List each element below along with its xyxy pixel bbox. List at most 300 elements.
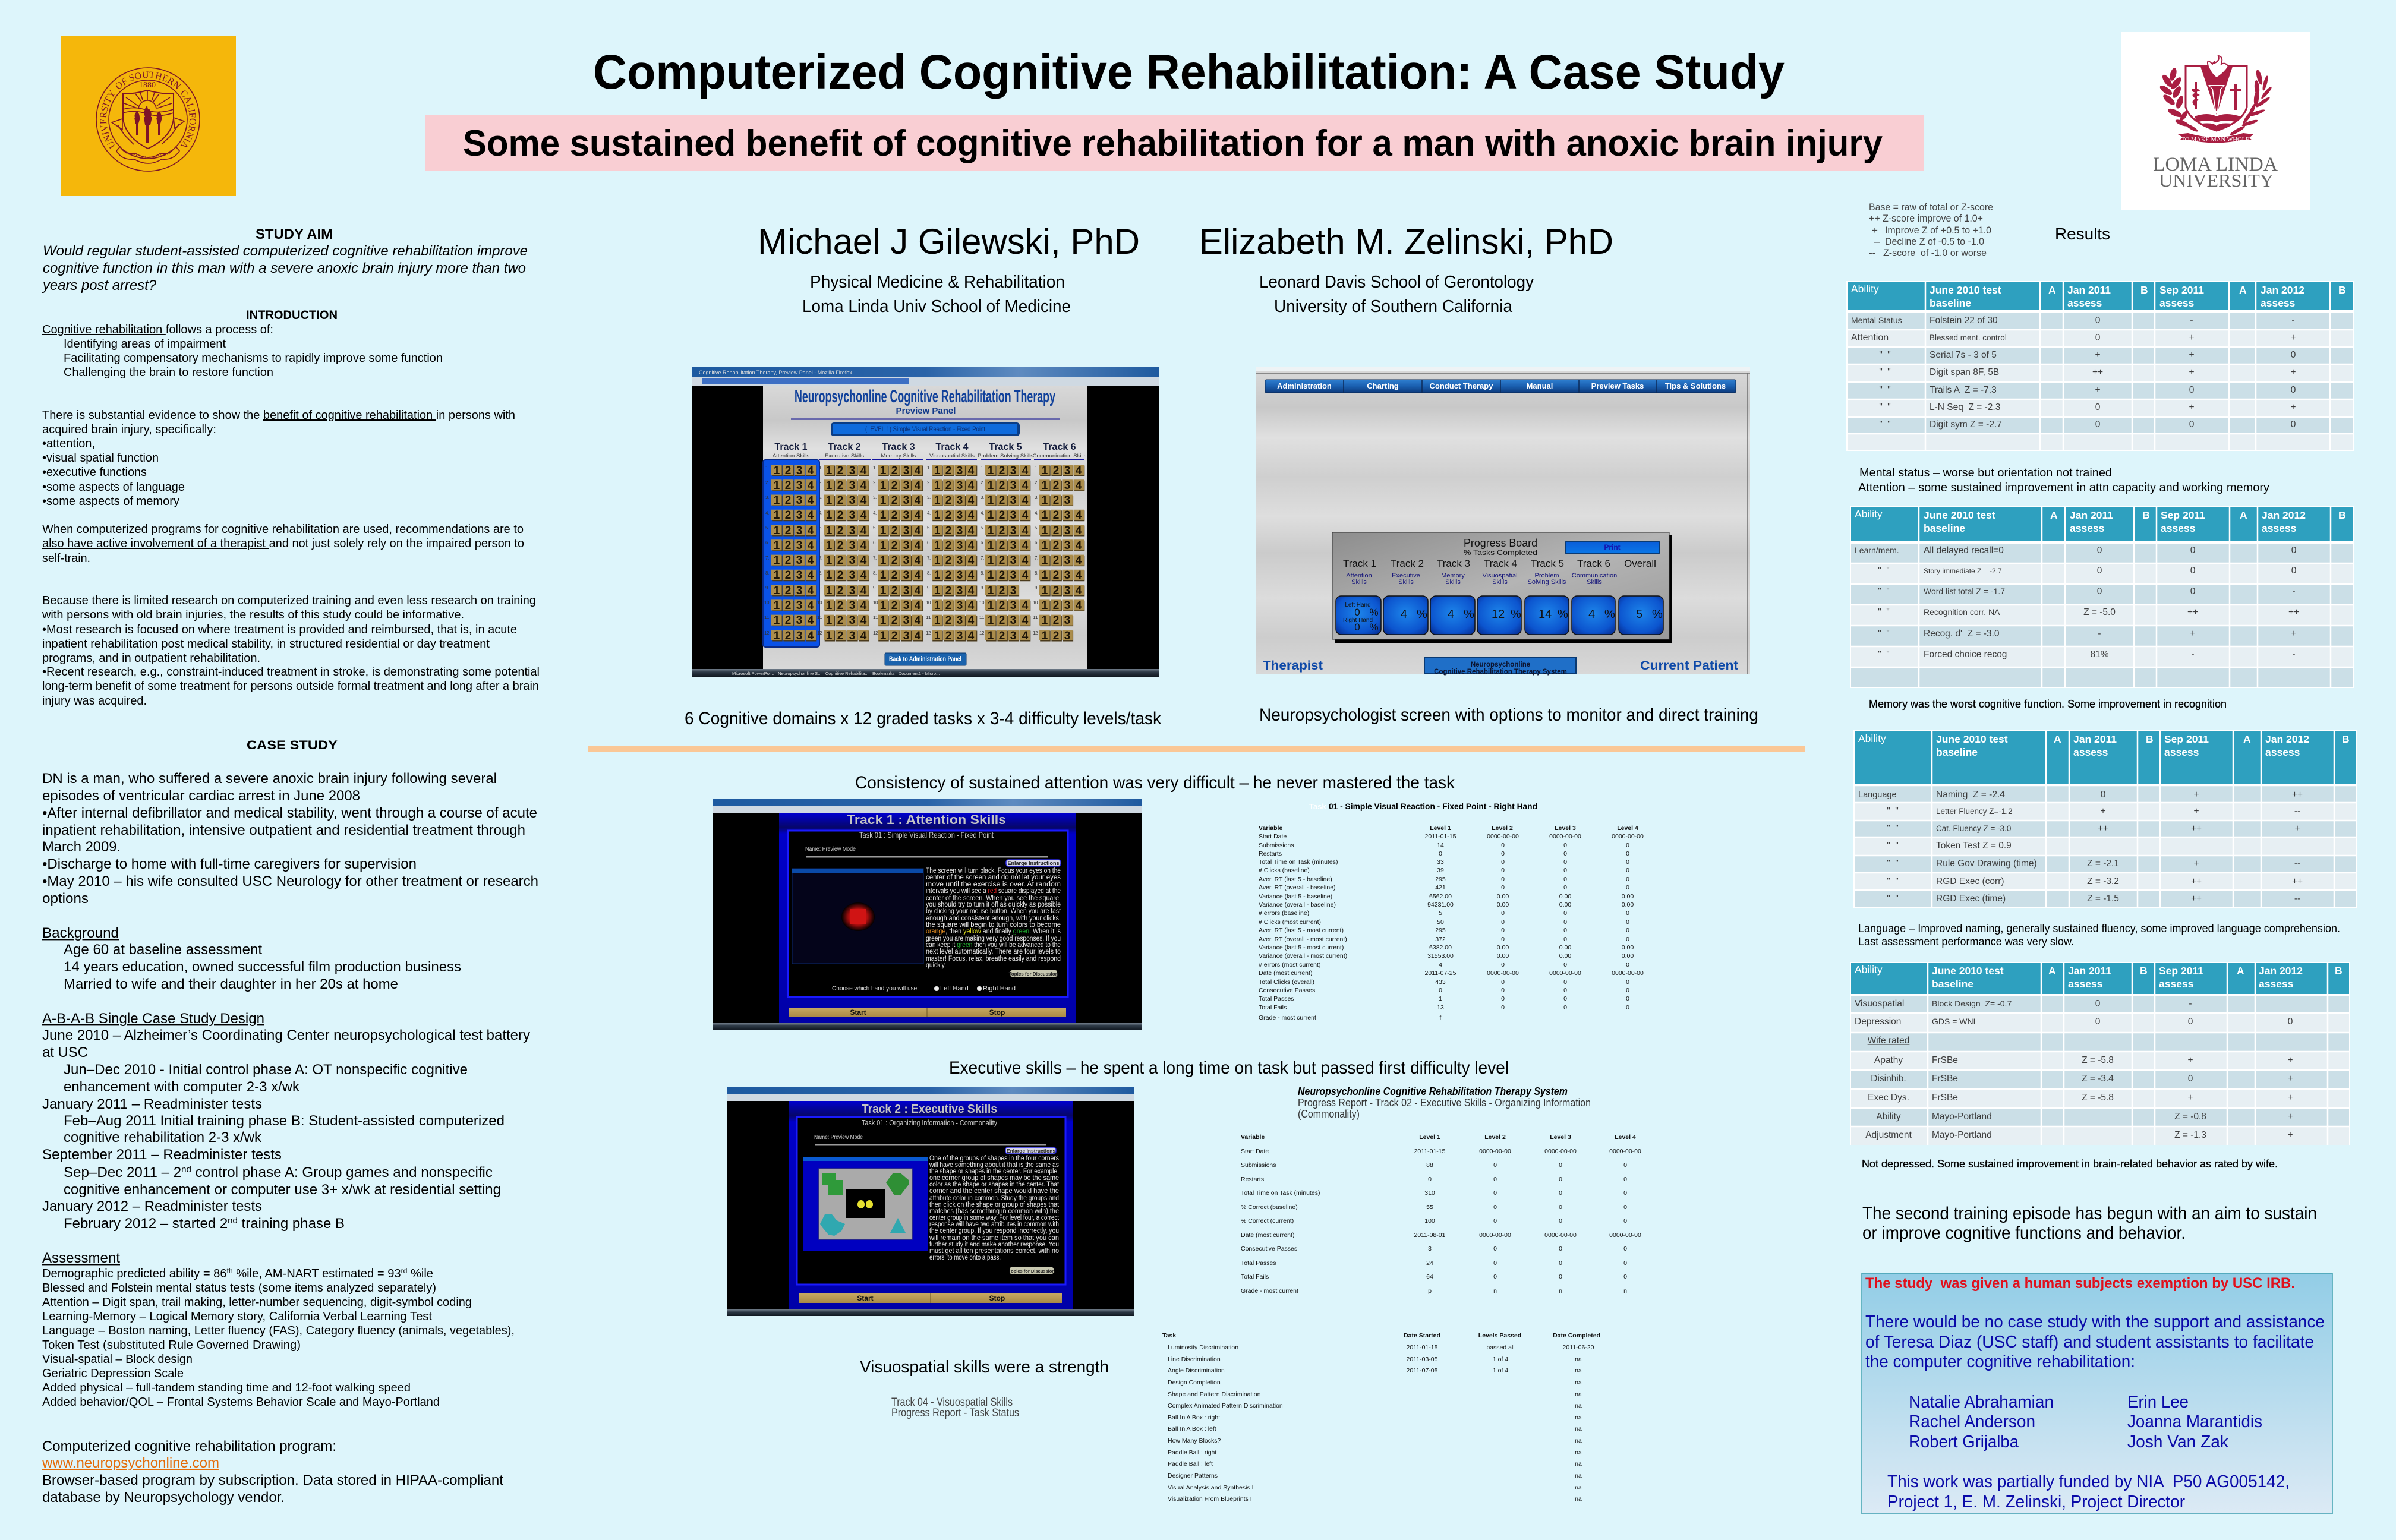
- data table: simple visual reaction: 0: [1501, 961, 1505, 968]
- progress board: 4: [1448, 608, 1454, 621]
- data table: simple visual reaction: 421: [1435, 884, 1446, 891]
- results table: learning and memory: Z = -5.0: [2083, 607, 2116, 617]
- task row numbers: 101010101010: [764, 600, 1038, 605]
- data table: simple visual reaction: Aver. RT (overall - most current): [1259, 936, 1347, 943]
- screenshot: track 1 attention skills: Topics for Discussion: [1009, 971, 1058, 977]
- top menu bar: Tips & Solutions: [1665, 381, 1726, 390]
- caption: visuospatial skills: Visuospatial skills were a strength: [860, 1358, 1109, 1377]
- progress board: 4: [1588, 608, 1595, 621]
- results table: mental status and attention: " ": [1879, 350, 1891, 360]
- results table: mental status and attention: Sep 2011: [2159, 284, 2204, 296]
- left column: case study: Age 60 at baseline assessment: [64, 942, 262, 958]
- data table: simple visual reaction: 2011-01-15: [1425, 833, 1456, 840]
- progress board: Communication: [1572, 572, 1617, 579]
- author: Elizabeth M. Zelinski: Elizabeth M. Zelinski, PhD: [1199, 222, 1613, 261]
- results table: visuospatial, depression and wife-rated behavior: +: [2287, 1112, 2293, 1122]
- task instructions: [929, 1155, 1060, 1261]
- data table: organizing information: p: [1428, 1287, 1432, 1295]
- data table: simple visual reaction: 0: [1563, 850, 1567, 857]
- data table: organizing information: Date (most current): [1241, 1232, 1294, 1239]
- left column: introduction: •some aspects of language: [42, 481, 185, 494]
- left column: case study: Added behavior/QOL – Frontal Systems Behavior Scale and Mayo-Portland: [42, 1396, 440, 1409]
- left column: introduction: self-train.: [42, 552, 90, 565]
- data table: visuospatial task status: Task: [1162, 1332, 1176, 1339]
- left column: program note: [42, 1438, 503, 1506]
- left column: introduction: INTRODUCTION: [246, 308, 338, 322]
- left column: case study: cognitive rehabilitation 2-3 x/wk: [64, 1129, 262, 1145]
- data table: simple visual reaction: 372: [1435, 936, 1446, 943]
- conclusion text: [1862, 1204, 2317, 1243]
- data table: simple visual reaction: 295: [1435, 876, 1446, 883]
- data table: simple visual reaction: Total Clicks (overall): [1259, 979, 1314, 986]
- results table: mental status and attention: Jan 2012: [2261, 284, 2304, 296]
- data table: organizing information: (Commonality): [1298, 1108, 1360, 1120]
- legend: score key: Base = raw of total or Z-score: [1869, 201, 1993, 213]
- author: Michael J Gilewski: Loma Linda Univ School of Medicine: [802, 297, 1071, 316]
- results table: language: +: [2294, 823, 2300, 834]
- results table: language: " ": [1887, 841, 1899, 851]
- data table: organizing information: 55: [1426, 1204, 1433, 1211]
- results table: learning and memory: -: [2292, 586, 2296, 597]
- results table: visuospatial, depression and wife-rated behavior: Jan 2012: [2259, 965, 2303, 977]
- data table: organizing information: 0: [1623, 1260, 1627, 1267]
- results table: visuospatial, depression and wife-rated behavior: +: [2187, 1055, 2193, 1065]
- results table: language: " ": [1887, 894, 1899, 904]
- acknowledgements box: There would be no case study with the support and assistance: [1865, 1312, 2325, 1331]
- results table: mental status and attention: Jan 2011: [2067, 284, 2111, 296]
- results table: visuospatial, depression and wife-rated behavior: Mayo-Portland: [1932, 1130, 1992, 1140]
- data table: organizing information: 310: [1424, 1189, 1435, 1197]
- data table: simple visual reaction: 0000-00-00: [1487, 833, 1519, 840]
- results table: learning and memory: Sep 2011: [2161, 509, 2205, 521]
- data table: simple visual reaction: Consecutive Passes: [1259, 987, 1315, 994]
- progress board: 0: [1354, 607, 1360, 618]
- results table: visuospatial, depression and wife-rated behavior: +: [2187, 1093, 2193, 1103]
- left column: case study: th: [227, 1267, 233, 1275]
- task instructions: move until the exercise is over. At random: [926, 881, 1061, 888]
- data table: simple visual reaction: 0: [1563, 859, 1567, 866]
- results table: mental status and attention: baseline: [1930, 297, 1971, 309]
- top menu bar: Conduct Therapy: [1430, 381, 1493, 390]
- results table: language: Z = -1.5: [2087, 894, 2119, 904]
- left column: case study: Visual-spatial – Block design: [42, 1353, 193, 1366]
- data table: visuospatial task status: na: [1575, 1391, 1582, 1398]
- data table: visuospatial task status: [1162, 1332, 1600, 1503]
- left column: introduction: Challenging the brain to restore function: [64, 366, 273, 379]
- left column: case study: inpatient rehabilitation, intensive outpatient and residential treatment through: [42, 822, 525, 838]
- progress board: Progress Board: [1464, 537, 1537, 549]
- data table: simple visual reaction: 2011-07-25: [1425, 970, 1456, 977]
- results table: language: RGD Exec (corr): [1936, 876, 2004, 886]
- data table: simple visual reaction: 0.00: [1497, 901, 1509, 908]
- results table: learning and memory: ++: [2288, 607, 2299, 617]
- data table: simple visual reaction: 0: [1501, 884, 1505, 891]
- results table: visuospatial, depression and wife-rated behavior: Ability: [1876, 1112, 1901, 1122]
- results table: mental status and attention: Attention: [1851, 333, 1889, 343]
- data table: organizing information: Level 4: [1615, 1134, 1636, 1141]
- results table: mental status and attention: +: [2290, 333, 2296, 343]
- data table: visuospatial task status: passed all: [1486, 1344, 1515, 1351]
- left column: case study: control phase A: Group games and nonspecific: [191, 1165, 493, 1181]
- results table: learning and memory: June 2010 test: [1924, 509, 1995, 521]
- data table: visuospatial task status: Date Started: [1404, 1332, 1440, 1339]
- task instructions: quickly.: [926, 962, 946, 969]
- results table: visuospatial, depression and wife-rated behavior: assess: [2159, 978, 2194, 990]
- results table: mental status and attention: 0: [2291, 419, 2296, 430]
- screenshot: preview panel track grid: (LEVEL 1) Simple Visual Reaction - Fixed Point: [865, 425, 986, 433]
- task instructions: will remain on the same item so that you can: [929, 1235, 1059, 1242]
- track column headers: Memory Skills: [881, 453, 916, 459]
- acknowledgements box: Project 1, E. M. Zelinski, Project Director: [1887, 1492, 2185, 1511]
- progress board: 12: [1492, 608, 1505, 621]
- results table: learning and memory: +: [2291, 629, 2297, 639]
- results table: visuospatial, depression and wife-rated behavior: 0: [2095, 1017, 2101, 1027]
- data table: organizing information: 0: [1623, 1273, 1627, 1280]
- left column: introduction: Identifying areas of impairment: [64, 337, 226, 351]
- data table: organizing information: n: [1623, 1287, 1627, 1295]
- data table: organizing information: n: [1493, 1287, 1497, 1295]
- legend: score key: Z-score of -1.0 or worse: [1883, 247, 1987, 258]
- acknowledgements box: The study was given a human subjects exemption by USC IRB.: [1865, 1275, 2295, 1292]
- legend: score key: ++ Z-score improve of 1.0+: [1869, 213, 1983, 224]
- data table: simple visual reaction: # errors (baseline): [1259, 910, 1309, 917]
- left column: introduction: There is substantial evidence to show the benefit of cognitive rehabilitation in persons with: [42, 409, 515, 422]
- results table: mental status and attention: " ": [1879, 402, 1891, 412]
- data table: simple visual reaction: 0000-00-00: [1549, 833, 1581, 840]
- screenshot: track 2 executive skills: Stop: [989, 1294, 1005, 1302]
- left column: case study: •May 2010 – his wife consulted USC Neurology for other treatment or research: [42, 873, 538, 889]
- data table: simple visual reaction: 0: [1501, 910, 1505, 917]
- results table: visuospatial, depression and wife-rated behavior: 0: [2095, 999, 2101, 1009]
- data table: simple visual reaction: 0.00: [1559, 944, 1571, 951]
- screenshot: preview panel track grid: Microsoft PowerPoi... Neuropsychonline S... Cognitive Rehabilita... Bookmarks Document1 - Micro...: [732, 671, 940, 676]
- data table: organizing information: 0: [1623, 1189, 1627, 1197]
- left column: case study: %ile, AM-NART estimated = 93: [233, 1267, 401, 1280]
- tile digits: 12341234123412341234123: [774, 630, 1070, 642]
- heading: results: Results: [2055, 225, 2110, 243]
- data table: organizing information: Level 1: [1419, 1134, 1440, 1141]
- left column: case study: cognitive enhancement or computer use 3+ x/wk at residential setting: [64, 1182, 501, 1198]
- results table: visuospatial, depression and wife-rated behavior: June 2010 test: [1932, 965, 2004, 977]
- results table: mental status and attention: 0: [2291, 385, 2296, 395]
- task instructions: center of the screen. When you see the square,: [926, 895, 1061, 902]
- acknowledgements box: of Teresa Diaz (USC staff) and student assistants to facilitate: [1865, 1333, 2314, 1352]
- data table: simple visual reaction: 0: [1563, 995, 1567, 1002]
- task instructions: the square will begin to turn colors to become: [926, 922, 1061, 929]
- data table: simple visual reaction: 39: [1437, 867, 1444, 874]
- subtitle banner: Some sustained benefit of cognitive rehabilitation for a man with anoxic brain injury: [463, 123, 1883, 164]
- task row numbers: 2.2.2.2.2.2.: [765, 480, 1038, 485]
- results table: learning and memory: Word list total Z = -1.7: [1924, 586, 2005, 596]
- progress board: 0: [1354, 621, 1360, 633]
- results table: visuospatial, depression and wife-rated behavior: +: [2287, 1074, 2293, 1084]
- left column: case study: [42, 739, 538, 1409]
- finding: language: [1858, 923, 2340, 948]
- finding: memory: Memory was the worst cognitive function. Some improvement in recognition: [1869, 698, 2227, 710]
- legend: score key: –: [1874, 236, 1880, 247]
- data table: simple visual reaction: 33: [1437, 859, 1444, 866]
- legend: score key: [1869, 201, 1993, 258]
- results table: language: Naming Z = -2.4: [1936, 790, 2005, 800]
- left column: case study: January 2012 – Readminister tests: [42, 1198, 262, 1214]
- data table: simple visual reaction: 13: [1437, 1004, 1444, 1011]
- top menu bar: Charting: [1367, 381, 1399, 390]
- left column: case study: at USC: [42, 1044, 88, 1061]
- results table: learning and memory: -: [2098, 629, 2101, 639]
- acknowledgements box: This work was partially funded by NIA P50 AG005142,: [1887, 1472, 2290, 1491]
- results table: learning and memory: [1850, 506, 2354, 688]
- results table: learning and memory: Learn/mem.: [1855, 545, 1899, 555]
- data table: visuospatial task status: Angle Discrimination: [1168, 1367, 1225, 1374]
- data table: simple visual reaction: 0: [1626, 1004, 1629, 1011]
- results table: language: Z = -3.2: [2087, 876, 2119, 886]
- data table: simple visual reaction: 0000-00-00: [1612, 970, 1644, 977]
- task instructions: next level automatically. There are four levels to: [926, 948, 1061, 955]
- task row numbers: [764, 465, 1038, 636]
- results table: language: +: [2193, 806, 2199, 816]
- data table: visuospatial task status: 2011-01-15: [1407, 1344, 1438, 1351]
- data table: simple visual reaction: Level 2: [1492, 825, 1513, 832]
- data table: organizing information: Progress Report - Track 02 - Executive Skills - Organizing Information: [1298, 1097, 1591, 1109]
- results table: visuospatial, depression and wife-rated behavior: 0: [2188, 1017, 2193, 1027]
- results table: mental status and attention: [1846, 281, 2354, 451]
- task instructions: one corner group of shapes may be the same: [929, 1175, 1059, 1182]
- tile digits: 123412341234123412341234: [774, 525, 1082, 537]
- results table: language: Sep 2011: [2164, 733, 2209, 745]
- conclusion text: or improve cognitive functions and behavior.: [1862, 1223, 2186, 1243]
- screenshot: track 2 executive skills: Track 2 : Executive Skills: [862, 1103, 997, 1116]
- logo: University of Southern California seal: CALIFORNIA: [180, 90, 196, 147]
- note: track 04 report label: Progress Report - Task Status: [891, 1407, 1019, 1419]
- data table: organizing information: 0000-00-00: [1544, 1232, 1577, 1239]
- task instructions: master! Focus, relax, breathe easily and respond: [926, 955, 1061, 962]
- results table: learning and memory: Story immediate Z = -2.7: [1924, 567, 2002, 575]
- screenshot: track 1 attention skills: Choose which hand you will use:: [832, 985, 919, 992]
- screenshot: preview panel track grid: Back to Administration Panel: [889, 655, 961, 663]
- left column: introduction: inpatient rehabilitation post medical stability, in structured residential or day treatment: [42, 638, 490, 651]
- results table: visuospatial, depression and wife-rated behavior: B: [2140, 965, 2148, 977]
- track column headers: Communication Skills: [1033, 453, 1087, 459]
- data table: simple visual reaction: 0: [1626, 884, 1629, 891]
- finding: mental status and attention: [1858, 466, 2269, 494]
- progress board: Track 4: [1484, 558, 1517, 569]
- left column: introduction: •Most research is focused on where treatment is provided and reimbursed, that is, in acute: [42, 623, 517, 636]
- data table: organizing information: Consecutive Passes: [1241, 1245, 1297, 1252]
- results table: language: A: [2054, 733, 2061, 745]
- progress board: Skills: [1398, 579, 1414, 586]
- left column: program note: database by Neuropsychology vendor.: [42, 1489, 285, 1506]
- left column: case study: February 2012 – started 2: [64, 1216, 228, 1232]
- left column: case study: Token Test (substituted Rule Governed Drawing): [42, 1339, 301, 1352]
- results table: language: Letter Fluency Z=-1.2: [1936, 807, 2013, 816]
- data table: visuospatial task status: na: [1575, 1472, 1582, 1479]
- data table: simple visual reaction: 0.00: [1559, 952, 1571, 960]
- data table: organizing information: Start Date: [1241, 1148, 1269, 1155]
- left column: introduction: programs, and in outpatient rehabilitation.: [42, 652, 260, 665]
- commonality shape puzzle: [803, 1157, 928, 1251]
- task instructions: errors, to move onto a pass.: [929, 1254, 1001, 1261]
- results table: mental status and attention: 0: [2095, 315, 2101, 326]
- data table: simple visual reaction: 6562.00: [1429, 893, 1452, 900]
- data table: organizing information: 0000-00-00: [1609, 1232, 1641, 1239]
- left column: introduction: •Recent research, e.g., constraint-induced treatment in stroke, is demonstrating some potential: [42, 665, 540, 679]
- data table: simple visual reaction: Aver. RT (last 5 - baseline): [1259, 876, 1332, 883]
- data table: organizing information: Submissions: [1241, 1162, 1276, 1169]
- progress board: Print: [1604, 543, 1621, 551]
- task row numbers: 4.4.4.4.4.4.: [765, 510, 1038, 516]
- screenshot: neuropsychologist progress board: Cognitive Rehabilitation Therapy System: [1434, 668, 1567, 676]
- task row numbers: 7.7.7.7.7.7.: [765, 556, 1038, 561]
- results table: learning and memory: +: [2190, 629, 2196, 639]
- tile digits: 12341234123412341234123: [774, 614, 1070, 627]
- legend: score key: Decline Z of -0.5 to -1.0: [1885, 236, 1984, 247]
- left column: case study: Demographic predicted ability = 86: [42, 1267, 226, 1280]
- data table: simple visual reaction: 0.00: [1497, 893, 1509, 900]
- track column headers: Track 6: [1043, 442, 1076, 452]
- data table: simple visual reaction: 6382.00: [1429, 944, 1452, 951]
- data table: visuospatial task status: Paddle Ball : right: [1168, 1449, 1216, 1456]
- results table: mental status and attention: Mental Status: [1851, 315, 1902, 325]
- results table: learning and memory: 81%: [2090, 649, 2109, 659]
- results table: visuospatial, depression and wife-rated behavior: -: [2189, 999, 2192, 1009]
- acknowledgements box: the computer cognitive rehabilitation:: [1865, 1352, 2135, 1371]
- data table: organizing information: 0: [1493, 1273, 1497, 1280]
- left column: case study: Learning-Memory – Logical Memory story, California Verbal Learning Test: [42, 1310, 432, 1323]
- progress board: Memory: [1441, 572, 1465, 579]
- left column: case study: Assessment: [42, 1250, 120, 1266]
- data table: simple visual reaction: 0: [1563, 1004, 1567, 1011]
- results table: visuospatial, depression and wife-rated behavior: Jan 2011: [2068, 965, 2111, 977]
- progress board: 5: [1636, 608, 1642, 621]
- data table: simple visual reaction: 0: [1626, 876, 1629, 883]
- progress board: Skills: [1587, 579, 1602, 586]
- note: track 04 report label: Track 04 - Visuospatial Skills: [891, 1396, 1013, 1409]
- left column: case study: Blessed and Folstein mental status tests (some items analyzed separately): [42, 1282, 436, 1295]
- data table: organizing information: 88: [1426, 1162, 1433, 1169]
- top menu bar: Preview Tasks: [1591, 381, 1644, 390]
- top menu bar: Manual: [1527, 381, 1553, 390]
- data table: simple visual reaction: Task: [1309, 802, 1326, 811]
- track column headers: Track 3: [882, 442, 915, 452]
- results table: language: ++: [2191, 823, 2202, 834]
- screenshot: track 1 attention skills: Name: Preview Mode: [805, 845, 856, 853]
- results table: learning and memory: Recognition corr. NA: [1924, 607, 2000, 617]
- data table: organizing information: 0: [1559, 1176, 1562, 1183]
- data table: organizing information: 0: [1493, 1162, 1497, 1169]
- data table: simple visual reaction: 0: [1626, 842, 1629, 849]
- tile digits: 123412341234123412341234: [774, 509, 1082, 522]
- data table: organizing information: 0: [1493, 1245, 1497, 1252]
- results table: language: " ": [1887, 806, 1899, 816]
- data table: simple visual reaction: 0: [1626, 859, 1629, 866]
- task instructions: further study it and make another response. You: [929, 1241, 1059, 1248]
- task instructions: then click on the shape or group of shapes that: [929, 1201, 1060, 1208]
- results table: mental status and attention: ++: [2092, 367, 2103, 377]
- data table: organizing information: 0000-00-00: [1479, 1148, 1511, 1155]
- data table: simple visual reaction: Submissions: [1259, 842, 1294, 849]
- results table: mental status and attention: A: [2239, 284, 2247, 296]
- data table: simple visual reaction: 0: [1563, 987, 1567, 994]
- data table: simple visual reaction: 0: [1501, 936, 1505, 943]
- data table: visuospatial task status: na: [1575, 1495, 1582, 1503]
- results table: learning and memory: -: [2292, 649, 2296, 659]
- results table: learning and memory: assess: [2161, 522, 2196, 534]
- data table: simple visual reaction: # errors (most current): [1259, 961, 1320, 968]
- data table: visuospatial task status: na: [1575, 1414, 1582, 1421]
- progress board: Track 2: [1391, 558, 1424, 569]
- logo: Loma Linda University: TO MAKE MAN WHOLE: [2181, 137, 2249, 143]
- results table: language: " ": [1887, 823, 1899, 834]
- data table: visuospatial task status: Visualization From Blueprints I: [1168, 1495, 1252, 1503]
- results table: mental status and attention: Folstein 22 of 30: [1930, 315, 1998, 326]
- data table: simple visual reaction: 0: [1626, 987, 1629, 994]
- results table: language: Rule Gov Drawing (time): [1936, 859, 2037, 869]
- top menu bar: Administration: [1277, 381, 1332, 390]
- data table: organizing information: 24: [1426, 1260, 1433, 1267]
- results table: mental status and attention: +: [2290, 367, 2296, 377]
- left column: case study: 14 years education, owned successful film production business: [64, 959, 461, 975]
- logo: University of Southern California seal: OF SOUTHERN: [115, 71, 182, 89]
- data table: organizing information: 0: [1559, 1273, 1562, 1280]
- left column: case study: Attention – Digit span, trail making, letter-number sequencing, digit-symbol coding: [42, 1296, 472, 1309]
- left column: introduction: When computerized programs for cognitive rehabilitation are used, recommendations are to: [42, 523, 524, 536]
- data table: organizing information: Total Passes: [1241, 1260, 1276, 1267]
- screenshot: track 2 executive skills: Name: Preview Mode: [814, 1134, 863, 1141]
- data table: simple visual reaction: 0: [1501, 979, 1505, 986]
- results table: mental status and attention: Serial 7s - 3 of 5: [1930, 350, 1997, 360]
- data table: visuospatial task status: na: [1575, 1449, 1582, 1456]
- author: Michael J Gilewski: Physical Medicine & Rehabilitation: [810, 273, 1065, 292]
- results table: language: assess: [2164, 746, 2199, 758]
- results table: mental status and attention: +: [2095, 385, 2101, 395]
- data table: simple visual reaction: 1: [1439, 995, 1442, 1002]
- left column: introduction: also have active involvement of a therapist and not just solely rely on the impaired person to: [42, 537, 524, 550]
- left column: case study: Geriatric Depression Scale: [42, 1367, 184, 1380]
- results table: visuospatial, depression and wife-rated behavior: 0: [2188, 1074, 2193, 1084]
- results table: language: --: [2294, 806, 2300, 816]
- data table: simple visual reaction: 0.00: [1622, 901, 1634, 908]
- data table: visuospatial task status: na: [1575, 1437, 1582, 1444]
- acknowledgements box: [1862, 1273, 2332, 1514]
- left column: introduction: •attention,: [42, 437, 95, 450]
- results table: mental status and attention: 0: [2095, 333, 2101, 343]
- data table: organizing information: Neuropsychonline Cognitive Rehabilitation Therapy System: [1298, 1085, 1568, 1097]
- data table: simple visual reaction: # Clicks (most current): [1259, 919, 1321, 926]
- results table: visuospatial, depression and wife-rated behavior: Z = -3.4: [2082, 1074, 2114, 1084]
- results table: mental status and attention: 0: [2291, 350, 2296, 360]
- task instructions: corner and the center shape would have the: [929, 1188, 1059, 1195]
- progress board: %: [1417, 608, 1427, 621]
- left column: study aim: cognitive function in this man with a severe anoxic brain injury more than two: [43, 260, 526, 276]
- results table: mental status and attention: 0: [2095, 402, 2101, 412]
- data table: simple visual reaction: Variance (last 5 - baseline): [1259, 893, 1332, 900]
- left column: case study: episodes of ventricular cardiac arrest in June 2008: [42, 788, 360, 804]
- data table: simple visual reaction: 5: [1439, 910, 1442, 917]
- results table: visuospatial, depression and wife-rated behavior: assess: [2068, 978, 2103, 990]
- progress board: Skills: [1492, 579, 1508, 586]
- data table: simple visual reaction: 0.00: [1559, 901, 1571, 908]
- results table: language: +: [2193, 790, 2199, 800]
- data table: simple visual reaction: 0: [1501, 987, 1505, 994]
- screenshot: track 1 attention skills: [713, 799, 1142, 1030]
- task instructions: by clicking your mouse button. When you are fast: [926, 908, 1061, 915]
- data table: simple visual reaction: 0: [1563, 884, 1567, 891]
- results table: language: Token Test Z = 0.9: [1936, 841, 2012, 851]
- data table: simple visual reaction: 0: [1626, 919, 1629, 926]
- conclusion text: The second training episode has begun with an aim to sustain: [1862, 1204, 2317, 1223]
- results table: language: Z = -2.1: [2087, 859, 2119, 869]
- task instructions: The screen will turn black. Focus your eyes on the: [926, 867, 1061, 875]
